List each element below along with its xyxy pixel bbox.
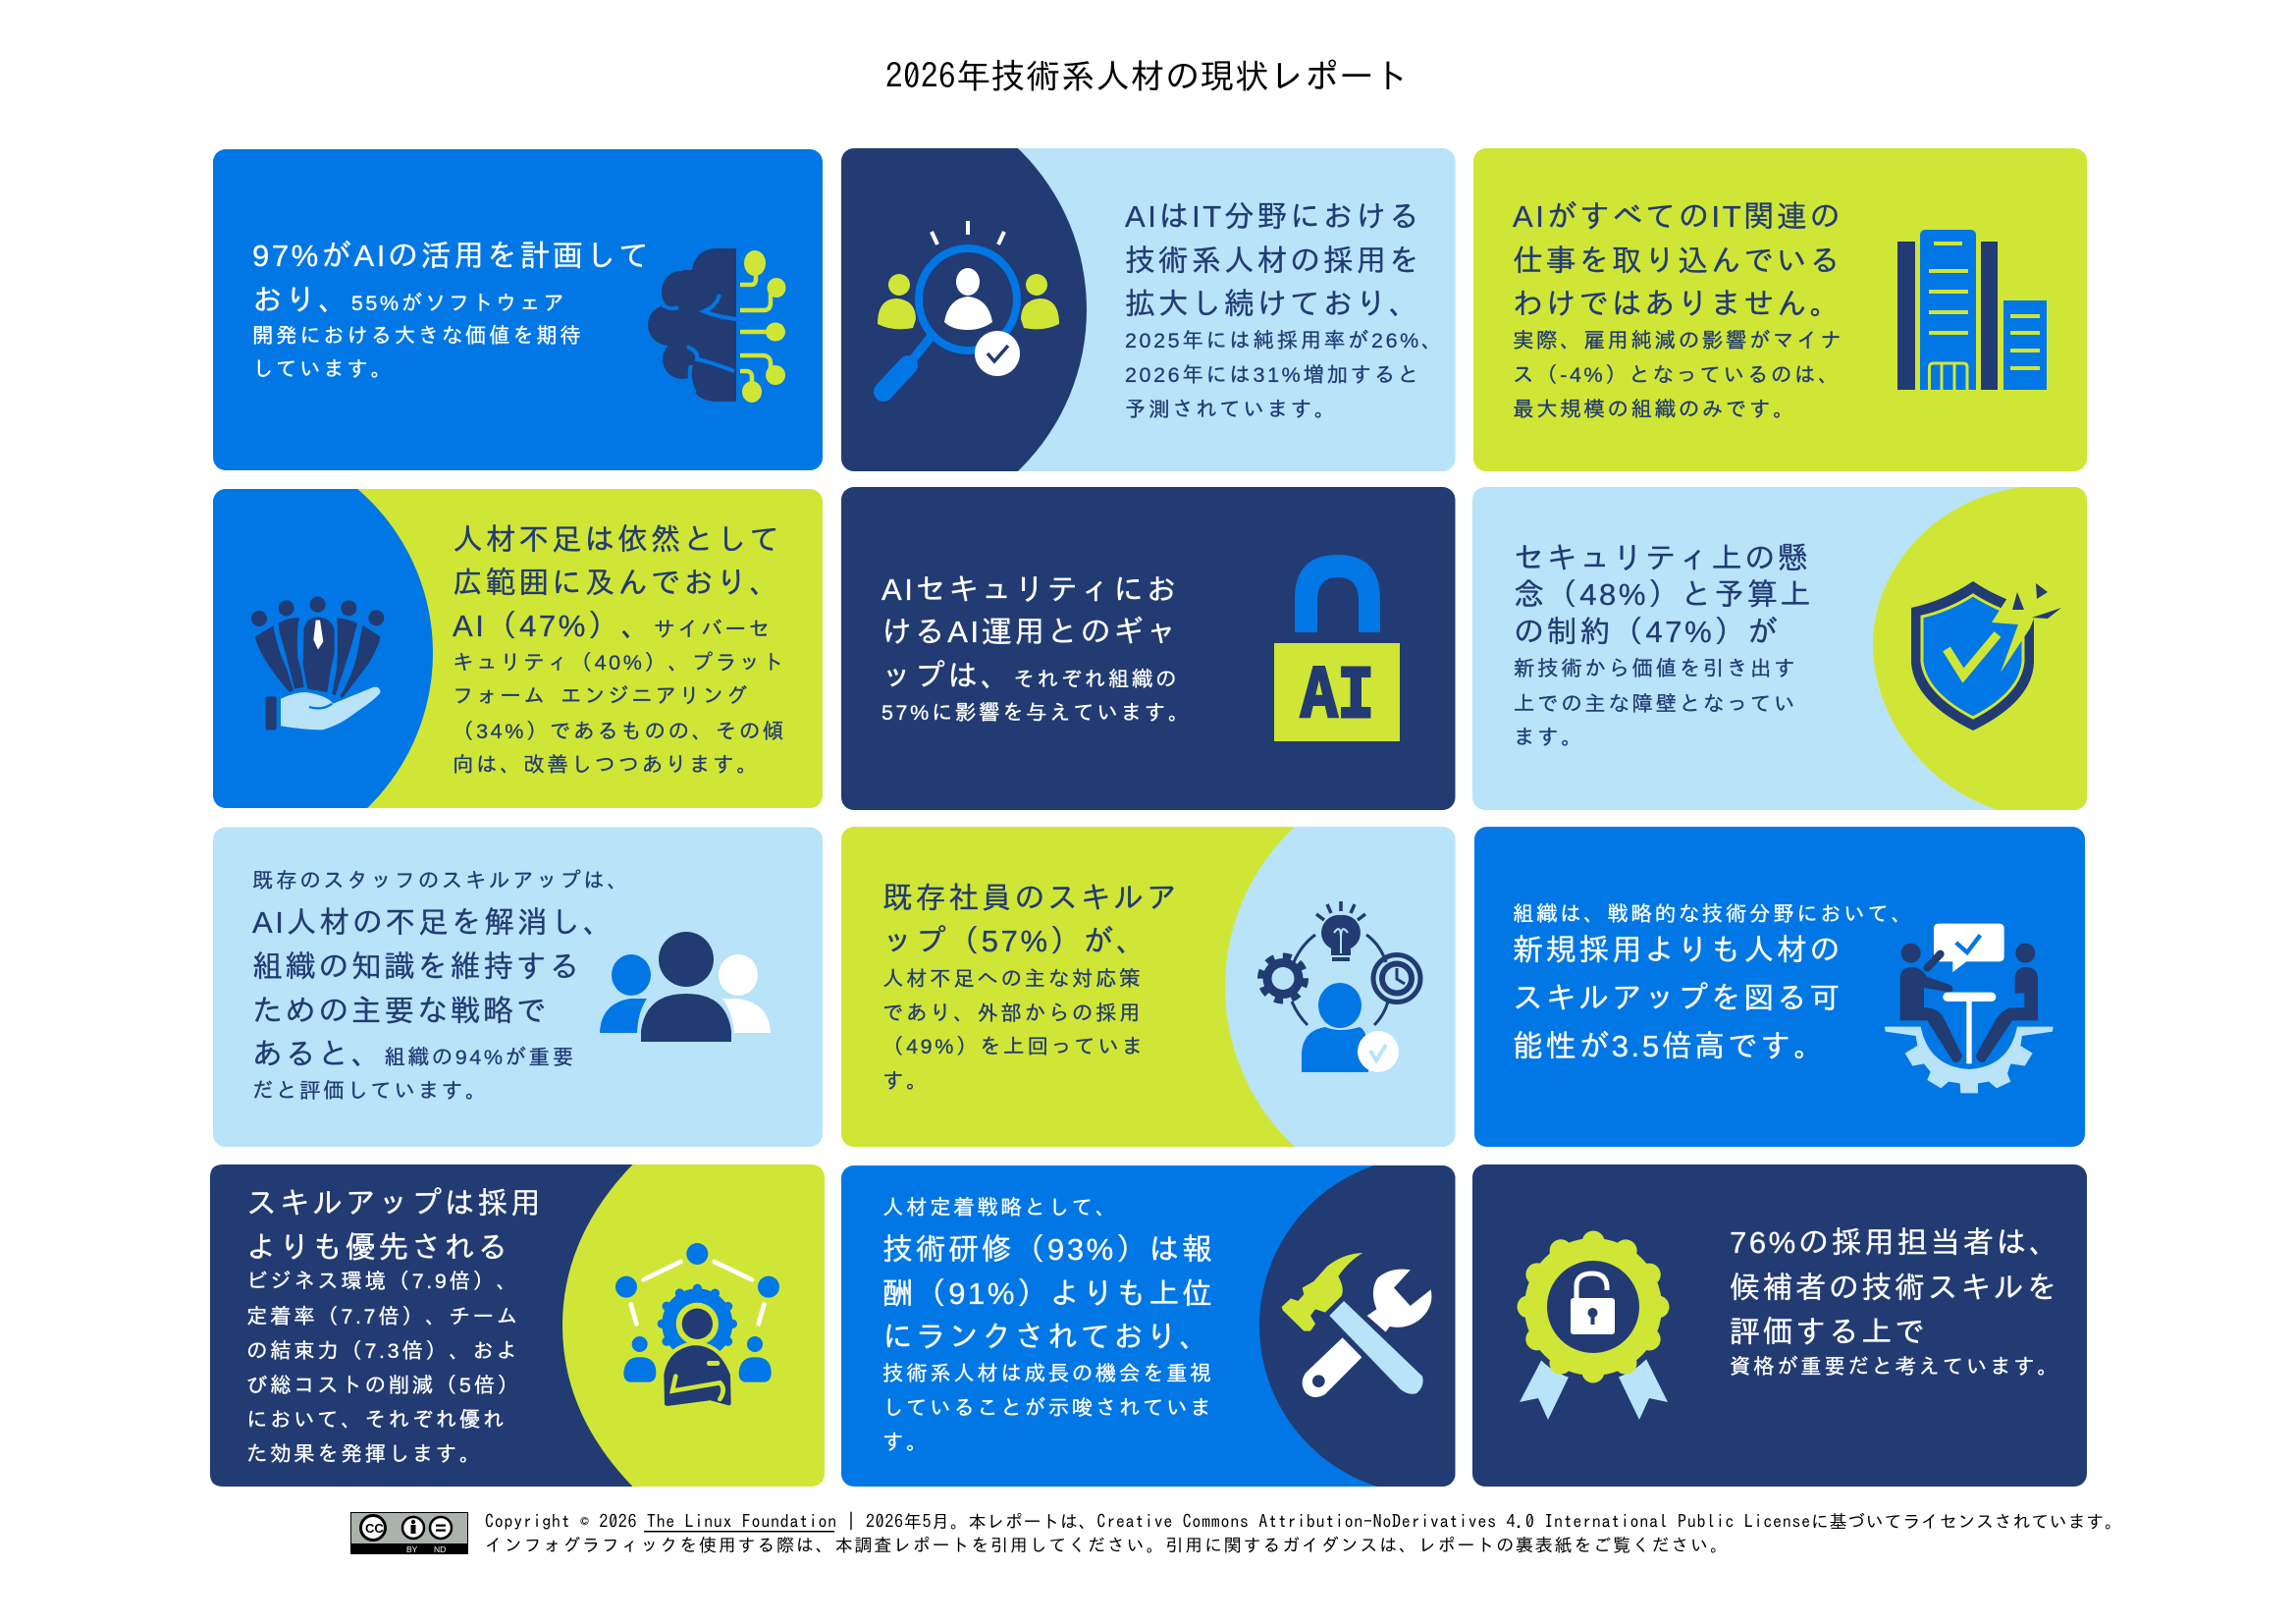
text: talent shortage: 向は、改善しつつあります。 [453, 753, 760, 777]
text: security and budget barriers: 念（48%）と予算上 [1514, 577, 1813, 612]
text: security and budget barriers: 新技術から価値を引き出す [1514, 657, 1797, 680]
text: talent shortage: 人材不足は依然として [453, 522, 782, 557]
text: AI not absorbing all jobs: AIがすべてのIT関連の [1513, 199, 1842, 234]
text: recruiters value credentials: 76%の採用担当者は、 [1730, 1225, 2062, 1260]
panel: retention strategy [841, 1165, 1455, 1487]
footer: copyright notice: Copyright © 2026 The Linux Foundation | 2026年5月。本レポートは、Creative Commons Attribution-NoDerivatives 4.0 International Public Licenseに基づいてライセンスされています。 [485, 1511, 2122, 1531]
icon: Creative Commons BY-ND badge: ND [434, 1544, 446, 1554]
panel: security and budget barriers [1472, 487, 2087, 810]
panel: upskilling 3.5x [1474, 827, 2085, 1147]
text: AI adoption: おり、55%がソフトウェア [252, 283, 566, 317]
text: security and budget barriers: ます。 [1514, 726, 1584, 749]
panel: upskilling versus hiring [841, 827, 1455, 1147]
text: recruiters value credentials: 候補者の技術スキルを [1730, 1271, 2059, 1305]
text: AI security gap: けるAI運用とのギャ [881, 615, 1179, 649]
icon: three people [600, 932, 771, 1042]
icon: certification badge [1519, 1232, 1668, 1420]
text: upskilling 3.5x [1513, 902, 1915, 1063]
panel: AI security gap [841, 487, 1455, 810]
text: AI security gap: AIセキュリティにお [881, 572, 1179, 607]
text: AI not absorbing all jobs [1513, 199, 1843, 421]
footer: copyright notice [485, 1511, 2122, 1554]
text: retention strategy: していることが示唆されていま [882, 1396, 1213, 1420]
text: retention strategy [882, 1196, 1215, 1454]
text: upskilling over hiring benefits: よりも優先される [246, 1230, 510, 1265]
panel: talent shortage [213, 489, 823, 808]
text: upskilling strategy: だと評価しています。 [252, 1079, 489, 1103]
text: retention strategy: 技術系人材は成長の機会を重視 [882, 1362, 1213, 1385]
text: upskilling over hiring benefits: 定着率（7.7倍）、チーム [246, 1305, 520, 1328]
text: AI adoption: 開発における大きな価値を期待 [252, 324, 583, 348]
text: tech hiring growth [1125, 199, 1445, 421]
icon: AI padlock [1274, 555, 1400, 741]
text: upskilling versus hiring: ップ（57%）が、 [882, 924, 1148, 958]
footer: copyright notice: インフォグラフィックを使用する際は、本調査レポートを引用してください。引用に関するガイダンスは、レポートの裏表紙をご覧ください。 [485, 1536, 1728, 1554]
text: AI security gap: ップは、それぞれ組織の [881, 659, 1179, 693]
panel: AI not absorbing all jobs [1473, 148, 2087, 471]
text: upskilling strategy: 組織の知識を維持する [252, 949, 582, 984]
text: AI not absorbing all jobs: 実際、雇用純減の影響がマイナ [1513, 329, 1843, 352]
text: upskilling strategy [252, 869, 631, 1103]
text: upskilling 3.5x: 能性が3.5倍高です。 [1513, 1029, 1827, 1063]
title: 2026年技術系人材の現状レポート [885, 59, 1410, 93]
text: recruiters value credentials [1730, 1225, 2062, 1379]
text: upskilling versus hiring: （49%）を上回っていま [882, 1035, 1146, 1058]
icon: hammer and wrench [1282, 1253, 1431, 1397]
text: upskilling versus hiring: 人材不足への主な対応策 [882, 967, 1143, 991]
text: AI adoption: しています。 [252, 357, 395, 381]
text: retention strategy: にランクされており、 [882, 1320, 1212, 1354]
text: security and budget barriers: の制約（47%）が [1514, 615, 1780, 649]
icon: office buildings [1897, 230, 2047, 390]
icon: AI brain [648, 248, 785, 403]
icon: Creative Commons BY-ND badge: BY [406, 1544, 418, 1554]
panel: tech hiring growth [841, 148, 1455, 471]
text: upskilling strategy: あると、組織の94%が重要 [252, 1037, 576, 1071]
text: tech hiring growth: 2025年には純採用率が26%、 [1125, 329, 1445, 352]
icon: people in a hand [251, 597, 384, 730]
icon: person with gear, bulb and clock [1260, 901, 1420, 1072]
text: AI security gap [881, 572, 1192, 725]
icon: Creative Commons BY-ND badge [350, 1512, 468, 1554]
panel: AI adoption [213, 149, 823, 470]
text: upskilling over hiring benefits: の結束力（7.3倍）、およ [246, 1339, 520, 1363]
text: security and budget barriers [1514, 541, 1813, 749]
text: upskilling versus hiring: 既存社員のスキルア [882, 881, 1179, 915]
text: upskilling strategy: ための主要な戦略で [252, 994, 549, 1028]
text: recruiters value credentials: 評価する上で [1730, 1315, 1928, 1349]
text: upskilling 3.5x: スキルアップを図る可 [1513, 981, 1842, 1015]
text: upskilling over hiring benefits [246, 1186, 543, 1466]
text: AI not absorbing all jobs: ス（-4%）となっているのは、 [1513, 363, 1842, 387]
text: AI adoption [252, 239, 652, 381]
text: talent shortage [453, 522, 786, 777]
text: upskilling versus hiring [882, 881, 1179, 1093]
text: AI security gap: 57%に影響を与えています。 [881, 701, 1192, 725]
text: talent shortage: 広範囲に及んでおり、 [453, 566, 782, 600]
text: AI adoption: 97%がAIの活用を計画して [252, 239, 652, 273]
panel: upskilling strategy [213, 827, 823, 1147]
icon: Creative Commons BY-ND badge: CC [365, 1521, 384, 1536]
text: tech hiring growth: 技術系人材の採用を [1125, 244, 1421, 278]
text: tech hiring growth: 2026年には31%増加すると [1125, 363, 1421, 387]
text: retention strategy: 酬（91%）よりも上位 [882, 1276, 1215, 1311]
text: upskilling versus hiring: であり、外部からの採用 [882, 1001, 1143, 1025]
text: upskilling versus hiring: す。 [882, 1069, 930, 1093]
icon: cracked shield [1911, 581, 2061, 731]
text: upskilling over hiring benefits: た効果を発揮します。 [246, 1442, 483, 1466]
text: talent shortage: キュリティ（40%）、プラット [453, 651, 786, 675]
text: AI not absorbing all jobs: 仕事を取り込んでいる [1513, 244, 1842, 278]
text: upskilling over hiring benefits: ビジネス環境（7.9倍）、 [246, 1270, 520, 1293]
text: upskilling 3.5x: 新規採用よりも人材の [1513, 933, 1842, 967]
icon: magnifier with candidates [878, 221, 1059, 392]
text: upskilling 3.5x: 組織は、戦略的な技術分野において、 [1513, 902, 1915, 926]
text: retention strategy: 人材定着戦略として、 [882, 1196, 1119, 1219]
text: retention strategy: 技術研修（93%）は報 [882, 1232, 1215, 1267]
text: talent shortage: AI（47%）、サイバーセ [453, 609, 773, 643]
text: talent shortage: フォーム エンジニアリング [453, 684, 750, 708]
text: talent shortage: （34%）であるものの、その傾 [453, 720, 786, 743]
icon: conversation on gear [1885, 924, 2054, 1093]
text: upskilling strategy: AI人材の不足を解消し、 [252, 905, 616, 940]
text: upskilling over hiring benefits: び総コストの削減（5倍） [246, 1374, 521, 1397]
icon: leader in a network [615, 1243, 779, 1408]
panel: upskilling over hiring benefits [210, 1164, 825, 1487]
text: AI not absorbing all jobs: 最大規模の組織のみです。 [1513, 398, 1796, 421]
text: upskilling over hiring benefits: スキルアップは採用 [246, 1186, 543, 1220]
text: tech hiring growth: AIはIT分野における [1125, 199, 1421, 234]
text: retention strategy: す。 [882, 1431, 930, 1454]
text: security and budget barriers: 上での主な障壁となってい [1514, 692, 1797, 716]
text: upskilling strategy: 既存のスタッフのスキルアップは、 [252, 869, 631, 893]
text: AI not absorbing all jobs: わけではありません。 [1513, 287, 1842, 321]
text: upskilling over hiring benefits: において、それぞれ優れ [246, 1408, 507, 1432]
text: security and budget barriers: セキュリティ上の懸 [1514, 541, 1810, 575]
panel: recruiters value credentials [1472, 1164, 2087, 1487]
text: recruiters value credentials: 資格が重要だと考えています。 [1730, 1355, 2060, 1379]
text: tech hiring growth: 拡大し続けており、 [1125, 287, 1421, 321]
icon: AI padlock: AI [1301, 655, 1374, 739]
text: tech hiring growth: 予測されています。 [1125, 398, 1338, 421]
